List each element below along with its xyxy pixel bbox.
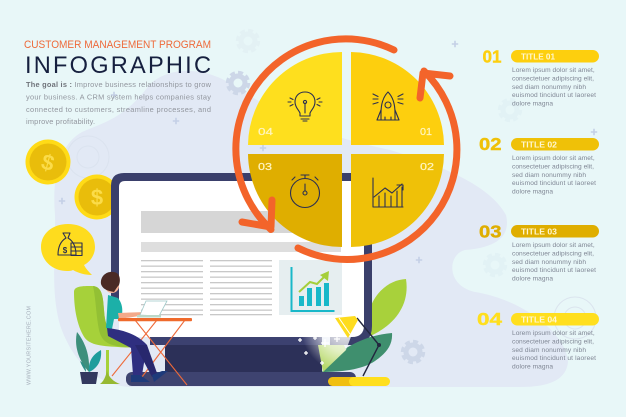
desk top (118, 318, 192, 321)
screen header bar (141, 211, 301, 233)
lamp base (328, 377, 368, 386)
person working (101, 272, 192, 382)
step 01: euismod tincidunt ut laoreet (512, 92, 596, 99)
quadrant 02 (351, 154, 444, 247)
step 03: TITLE 03 (521, 226, 557, 236)
step 01: consectetuer adipiscing elit, (512, 76, 594, 82)
speech bubble with money bag (41, 224, 95, 275)
icon: light bulb (288, 92, 322, 121)
quadrant 01 (351, 52, 444, 145)
laptop on desk (140, 301, 167, 316)
label 01: 01 (420, 127, 432, 138)
intro paragraph: The goal is : Improve business relationships to grow (26, 80, 212, 89)
label 02: 02 (420, 162, 435, 173)
lamp arm (357, 318, 379, 376)
text lines right (210, 260, 272, 315)
person legs (107, 328, 147, 375)
intro paragraph (26, 80, 212, 126)
person head (105, 279, 119, 293)
icon: growth chart (373, 178, 403, 207)
step 02: sed diam nonummy nibh (512, 172, 586, 179)
step 03: Lorem ipsum dolor sit amet, (512, 242, 595, 249)
person torso (106, 295, 122, 329)
heading: program: CUSTOMER MANAGEMENT PROGRAM (24, 39, 211, 51)
lamp light glow (300, 318, 358, 372)
lamp head (335, 316, 358, 338)
intro paragraph: improve profitability. (26, 117, 95, 126)
step 02: TITLE 02 (521, 140, 557, 150)
intro paragraph: your business. A CRM system helps companies stay (26, 92, 211, 102)
step 04: 04 (477, 309, 502, 329)
step 04: consectetuer adipiscing elit, (512, 338, 594, 346)
step 01: dolore magna (512, 100, 553, 108)
laptop body (165, 345, 322, 372)
person shoes (131, 375, 150, 382)
title: INFOGRAPHIC (25, 53, 211, 79)
background gears and plus marks (59, 30, 597, 362)
person arm (118, 312, 146, 319)
step 04 (477, 309, 599, 370)
step 01: TITLE 01 (521, 52, 555, 62)
laptop screen frame (111, 173, 372, 345)
label 04: 04 (258, 127, 274, 138)
label 03: 03 (258, 162, 273, 173)
sparkles (298, 336, 340, 365)
step 02: 02 (479, 134, 502, 154)
step 04: TITLE 04 (521, 314, 557, 324)
speech bubble with money bag: $ (63, 246, 68, 255)
step 04: sed diam nonummy nibh (512, 347, 586, 354)
step 03: 03 (479, 222, 502, 242)
office chair (74, 286, 133, 384)
step 04: Lorem ipsum dolor sit amet, (512, 330, 595, 337)
step 03 (479, 222, 599, 282)
plant in pot (76, 332, 101, 384)
screen sub bar (141, 242, 341, 252)
pie chart (248, 52, 444, 247)
step 03: euismod tincidunt ut laoreet (512, 267, 596, 274)
website vertical text: WWW.YOURSITEHERE.COM (26, 306, 32, 385)
step 01: Lorem ipsum dolor sit amet, (512, 67, 595, 74)
quadrant 03 (248, 154, 342, 247)
step 04: dolore magna (512, 364, 553, 370)
step 01: sed diam nonummy nibh (512, 84, 586, 91)
icon: coin 2 (74, 174, 120, 220)
step 02 (479, 134, 599, 196)
light green leaf (366, 279, 407, 338)
step 03: dolore magna (512, 276, 553, 282)
laptop chin (150, 337, 322, 345)
screen chart (279, 260, 342, 315)
step 02: consectetuer adipiscing elit, (512, 164, 594, 170)
step 03: consectetuer adipiscing elit, (512, 250, 594, 258)
icon: stopwatch (290, 175, 320, 208)
icon: coin 1: $ (39, 149, 57, 176)
arrow: lower right arc (298, 71, 457, 259)
laptop base (126, 372, 356, 386)
step 03: sed diam nonummy nibh (512, 259, 586, 266)
icon: coin 1 (26, 140, 70, 184)
text lines left (141, 260, 203, 315)
quadrant 04 (248, 52, 342, 145)
circular arrows (236, 39, 457, 259)
desk lamp (298, 316, 390, 386)
step 01: 01 (482, 46, 502, 66)
dark green leaf (322, 333, 392, 372)
laptop (111, 173, 372, 372)
step 02: Lorem ipsum dolor sit amet, (512, 155, 595, 162)
step 02: euismod tincidunt ut laoreet (512, 180, 596, 187)
icon: coin 2: $ (91, 185, 103, 210)
step 01 (482, 46, 599, 108)
laptop screen (119, 181, 364, 337)
desk legs (112, 320, 187, 385)
background blob (54, 71, 568, 387)
lamp head stripe (339, 318, 350, 334)
icon: rocket (373, 92, 403, 120)
arrow: upper left arc (236, 39, 394, 229)
step 04: euismod tincidunt ut laoreet (512, 355, 596, 362)
step 02: dolore magna (512, 188, 553, 196)
intro paragraph: connected to customers, streamline processes, and (26, 105, 211, 114)
